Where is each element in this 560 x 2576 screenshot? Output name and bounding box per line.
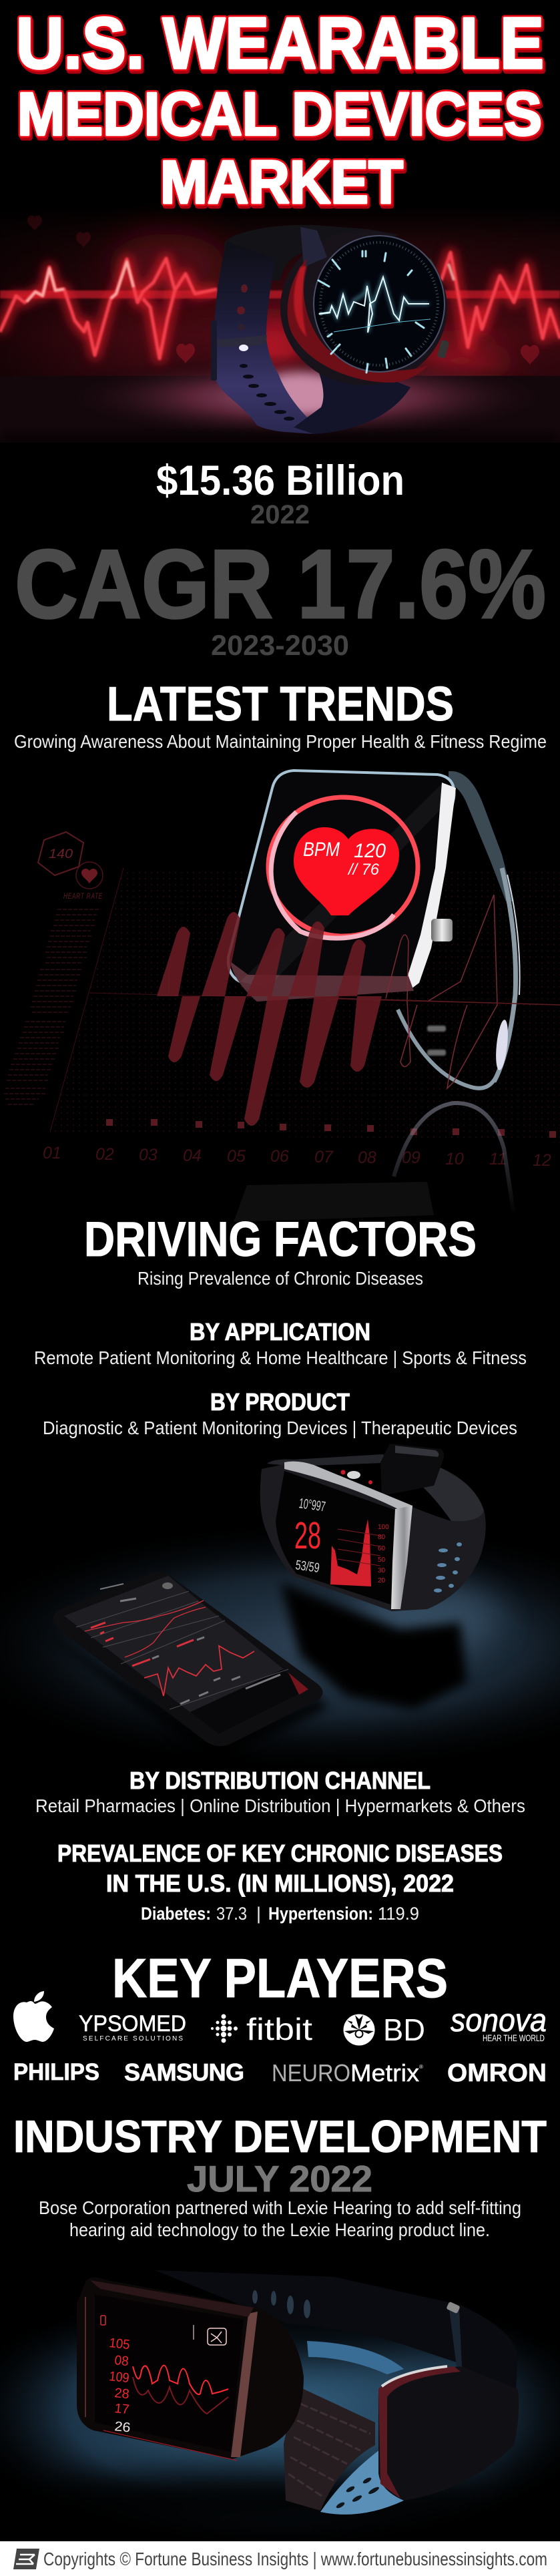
development text: Bose Corporation partnered with Lexie Hearing to add self-fitting <box>39 2197 521 2218</box>
silver side edge <box>406 783 456 991</box>
watch reflection <box>394 1103 514 1215</box>
axis numbers: 04 <box>183 1146 202 1165</box>
back band top <box>449 771 514 901</box>
logo: Philips: PHILIPS <box>13 2059 99 2085</box>
faint hearts <box>27 215 539 365</box>
band loop back <box>267 1454 400 1466</box>
pink floor glow <box>47 353 560 441</box>
device side scale: 100 <box>378 1524 389 1531</box>
market size year: 2022 <box>250 500 310 529</box>
band clip <box>380 1444 444 1496</box>
driving factors text: Rising Prevalence of Chronic Diseases <box>137 1268 423 1289</box>
device main number: 28 <box>294 1514 321 1557</box>
prevalence figures: 37.3 <box>216 1904 247 1924</box>
reflection on screen <box>240 783 449 988</box>
prevalence heading <box>57 1840 503 1897</box>
heading: driving factors: DRIVING FACTORS <box>84 1213 477 1267</box>
axis numbers: 07 <box>314 1148 334 1166</box>
back strap <box>155 2270 518 2404</box>
strap buckle <box>212 335 267 347</box>
hexagon value <box>38 832 83 875</box>
axis numbers: 10 <box>445 1150 464 1168</box>
grid axis lines <box>50 868 560 1132</box>
watch face ticks <box>318 251 424 373</box>
small text column <box>4 909 100 1104</box>
device shadow <box>40 2474 481 2527</box>
heading: key players: KEY PLAYERS <box>112 1947 448 2009</box>
red heart with reading: 120 <box>354 840 386 862</box>
silver top bar <box>284 1462 412 1514</box>
device screen readings: 28 <box>113 2386 130 2402</box>
top button <box>347 1471 360 1479</box>
title white layer <box>16 3 544 216</box>
band keepers <box>427 1026 446 1056</box>
watch face <box>314 236 445 372</box>
lower strap dark section <box>294 361 410 434</box>
lower blue strap <box>320 2436 404 2515</box>
progress ring <box>268 797 418 938</box>
title outline layer <box>16 3 544 216</box>
logo: NeuroMetrix: NEURO <box>272 2059 350 2087</box>
outlined ECG spikes <box>334 895 560 1088</box>
tick ring <box>320 242 438 365</box>
red heart with reading: // 76 <box>347 861 380 879</box>
logos: key players <box>13 1991 547 2087</box>
title white layer: MARKET <box>160 149 403 216</box>
prevalence heading: PREVALENCE OF KEY CHRONIC DISEASES <box>57 1840 503 1867</box>
logo: BD <box>343 2012 425 2047</box>
red heart with reading <box>294 827 399 915</box>
watch body <box>228 771 454 987</box>
watch crown buttons <box>422 258 438 275</box>
watch case <box>280 230 447 385</box>
phone <box>53 1572 323 1746</box>
blue glow <box>0 2274 560 2547</box>
prevalence figures: Diabetes: <box>141 1904 211 1924</box>
trends image: smartwatch over ECG grid <box>4 771 560 1222</box>
application segments: Remote Patient Monitoring & Home Healthcare | Sports & Fitness <box>34 1347 527 1368</box>
axis tick markers <box>106 1119 556 1138</box>
device shadow <box>280 1582 467 1709</box>
phone shadow <box>40 1629 327 1763</box>
axis numbers: 06 <box>270 1147 289 1166</box>
title <box>16 3 545 219</box>
prevalence figures: | <box>256 1904 261 1924</box>
prevalence heading: IN THE U.S. (IN MILLIONS), 2022 <box>106 1870 454 1897</box>
watch strap <box>214 242 410 434</box>
floor fade <box>0 433 560 447</box>
device side scale: 30 <box>378 1567 386 1574</box>
device side scale: 50 <box>378 1556 386 1564</box>
icon: Fortune Business Insights logo <box>13 2549 39 2569</box>
device bar chart <box>330 1519 389 1586</box>
heading: by distribution channel: BY DISTRIBUTION CHANNEL <box>129 1767 431 1794</box>
development text <box>39 2197 521 2240</box>
logo: Omron: OMRON <box>447 2059 547 2087</box>
dotted grid <box>50 868 560 1143</box>
device screen readings: 109 <box>108 2369 130 2386</box>
prevalence figures: 119.9 <box>378 1904 419 1924</box>
axis numbers: 03 <box>139 1146 158 1164</box>
phone charts <box>85 1600 254 1696</box>
development image: dark wrist device <box>0 2264 560 2547</box>
reflected body <box>234 1182 434 1222</box>
title outline layer: MEDICAL DEVICES <box>17 81 542 148</box>
logo: Fitbit: fitbit <box>246 2012 312 2047</box>
bronze rim <box>231 2312 258 2457</box>
product segments: Diagnostic & Patient Monitoring Devices | Therapeutic Devices <box>43 1418 517 1438</box>
distribution segments: Retail Pharmacies | Online Distribution | Hypermarkets & Others <box>35 1795 525 1816</box>
phone lower dark section <box>190 1669 308 1734</box>
red backdrop <box>0 207 560 377</box>
logo: Fitbit <box>211 2012 312 2047</box>
heart rate label: HEART RATE <box>63 891 103 901</box>
axis numbers: 01 <box>43 1144 61 1162</box>
logo: Ypsomed: SELFCARE SOLUTIONS <box>83 2035 183 2043</box>
device screen readings: 26 <box>113 2419 131 2435</box>
red rim <box>288 258 429 383</box>
device screen readings: 17 <box>113 2401 130 2417</box>
floor <box>0 376 560 443</box>
ECG spikes <box>157 912 382 1126</box>
strap holes <box>237 284 294 421</box>
heading: latest trends: LATEST TRENDS <box>107 678 454 731</box>
device side scale: 20 <box>378 1577 386 1584</box>
buckle piece <box>378 2366 519 2501</box>
market size value: $15.36 Billion <box>156 457 404 504</box>
back band loop <box>398 868 520 1088</box>
axis numbers: 05 <box>227 1147 246 1166</box>
title shadow layer <box>17 5 545 219</box>
logo: NeuroMetrix: Metrix <box>350 2059 419 2087</box>
device side scale: 60 <box>378 1545 386 1552</box>
blue floor glow <box>0 1519 560 1773</box>
inner blue loop highlight <box>307 2341 404 2374</box>
hexagon value: 140 <box>49 847 73 861</box>
watch strap back <box>220 225 400 280</box>
device waveform <box>133 2365 228 2414</box>
axis numbers: 09 <box>402 1148 421 1167</box>
device readouts: 10°997 <box>298 1496 326 1515</box>
strap holes <box>252 2290 310 2318</box>
axis numbers: 11 <box>489 1150 507 1168</box>
logo: BD: BD <box>383 2012 425 2047</box>
bottom rim <box>230 961 414 1002</box>
prevalence figures: Hypertension: <box>268 1904 373 1924</box>
title outline layer: MARKET <box>160 149 403 216</box>
phone red corner glare <box>288 1673 308 1695</box>
silver side bar <box>391 1506 412 1609</box>
device screen readings <box>108 2336 131 2435</box>
device screen readings: 08 <box>113 2353 129 2369</box>
prevalence figures <box>141 1904 419 1924</box>
heartbeat line <box>0 252 560 359</box>
battery icon <box>101 2316 105 2325</box>
axis numbers: 12 <box>533 1151 551 1170</box>
logo: NeuroMetrix <box>272 2059 423 2087</box>
device side scale: 80 <box>378 1534 386 1541</box>
heading: by product: BY PRODUCT <box>210 1388 350 1416</box>
backdrop edge shading <box>0 207 560 377</box>
watch face heartbeat <box>319 277 431 333</box>
phone red labels <box>91 1623 194 1666</box>
logo: Apple <box>13 1991 54 2042</box>
phone grey labels <box>120 1598 280 1704</box>
device screen readings: 105 <box>108 2336 131 2352</box>
development text: hearing aid technology to the Lexie Hearing product line. <box>69 2219 490 2240</box>
device screen <box>95 2294 244 2452</box>
product image: wrist device and phone <box>0 1444 560 1773</box>
axis numbers <box>43 1144 551 1170</box>
logo: Ypsomed: YPSOMED <box>79 2011 186 2036</box>
phone camera <box>162 1582 173 1589</box>
development date: JULY 2022 <box>187 2158 372 2199</box>
axis numbers: 02 <box>95 1145 114 1164</box>
logo: NeuroMetrix: ® <box>419 2064 423 2070</box>
horizontal heartbeat band <box>0 290 560 298</box>
phone dividers <box>76 1591 288 1709</box>
device side vents <box>434 1542 462 1592</box>
hero image: watch with red heartbeat backdrop <box>0 207 560 447</box>
phone screen <box>64 1576 308 1734</box>
heart rate icon <box>76 862 103 889</box>
device body <box>260 1464 486 1611</box>
device screen <box>276 1471 398 1604</box>
logo: Sonova: sonova <box>451 2003 547 2038</box>
footer bar <box>0 2541 560 2576</box>
device secondary readout: 53/59 <box>294 1558 320 1576</box>
axis numbers: 08 <box>358 1148 376 1167</box>
backdrop hot spots <box>107 234 507 381</box>
CAGR period: 2023-2030 <box>211 630 349 662</box>
heading: by application: BY APPLICATION <box>190 1318 370 1345</box>
strap tip <box>449 2304 462 2367</box>
textured band <box>284 2386 375 2511</box>
crown <box>431 919 453 941</box>
logo: Samsung: SAMSUNG <box>124 2059 244 2086</box>
device body <box>77 2278 304 2459</box>
device icon <box>194 2325 226 2345</box>
red heart with reading: BPM <box>303 839 340 861</box>
title white layer: MEDICAL DEVICES <box>17 81 542 148</box>
title shadow layer: MARKET <box>162 152 404 219</box>
device side scale <box>378 1524 389 1584</box>
